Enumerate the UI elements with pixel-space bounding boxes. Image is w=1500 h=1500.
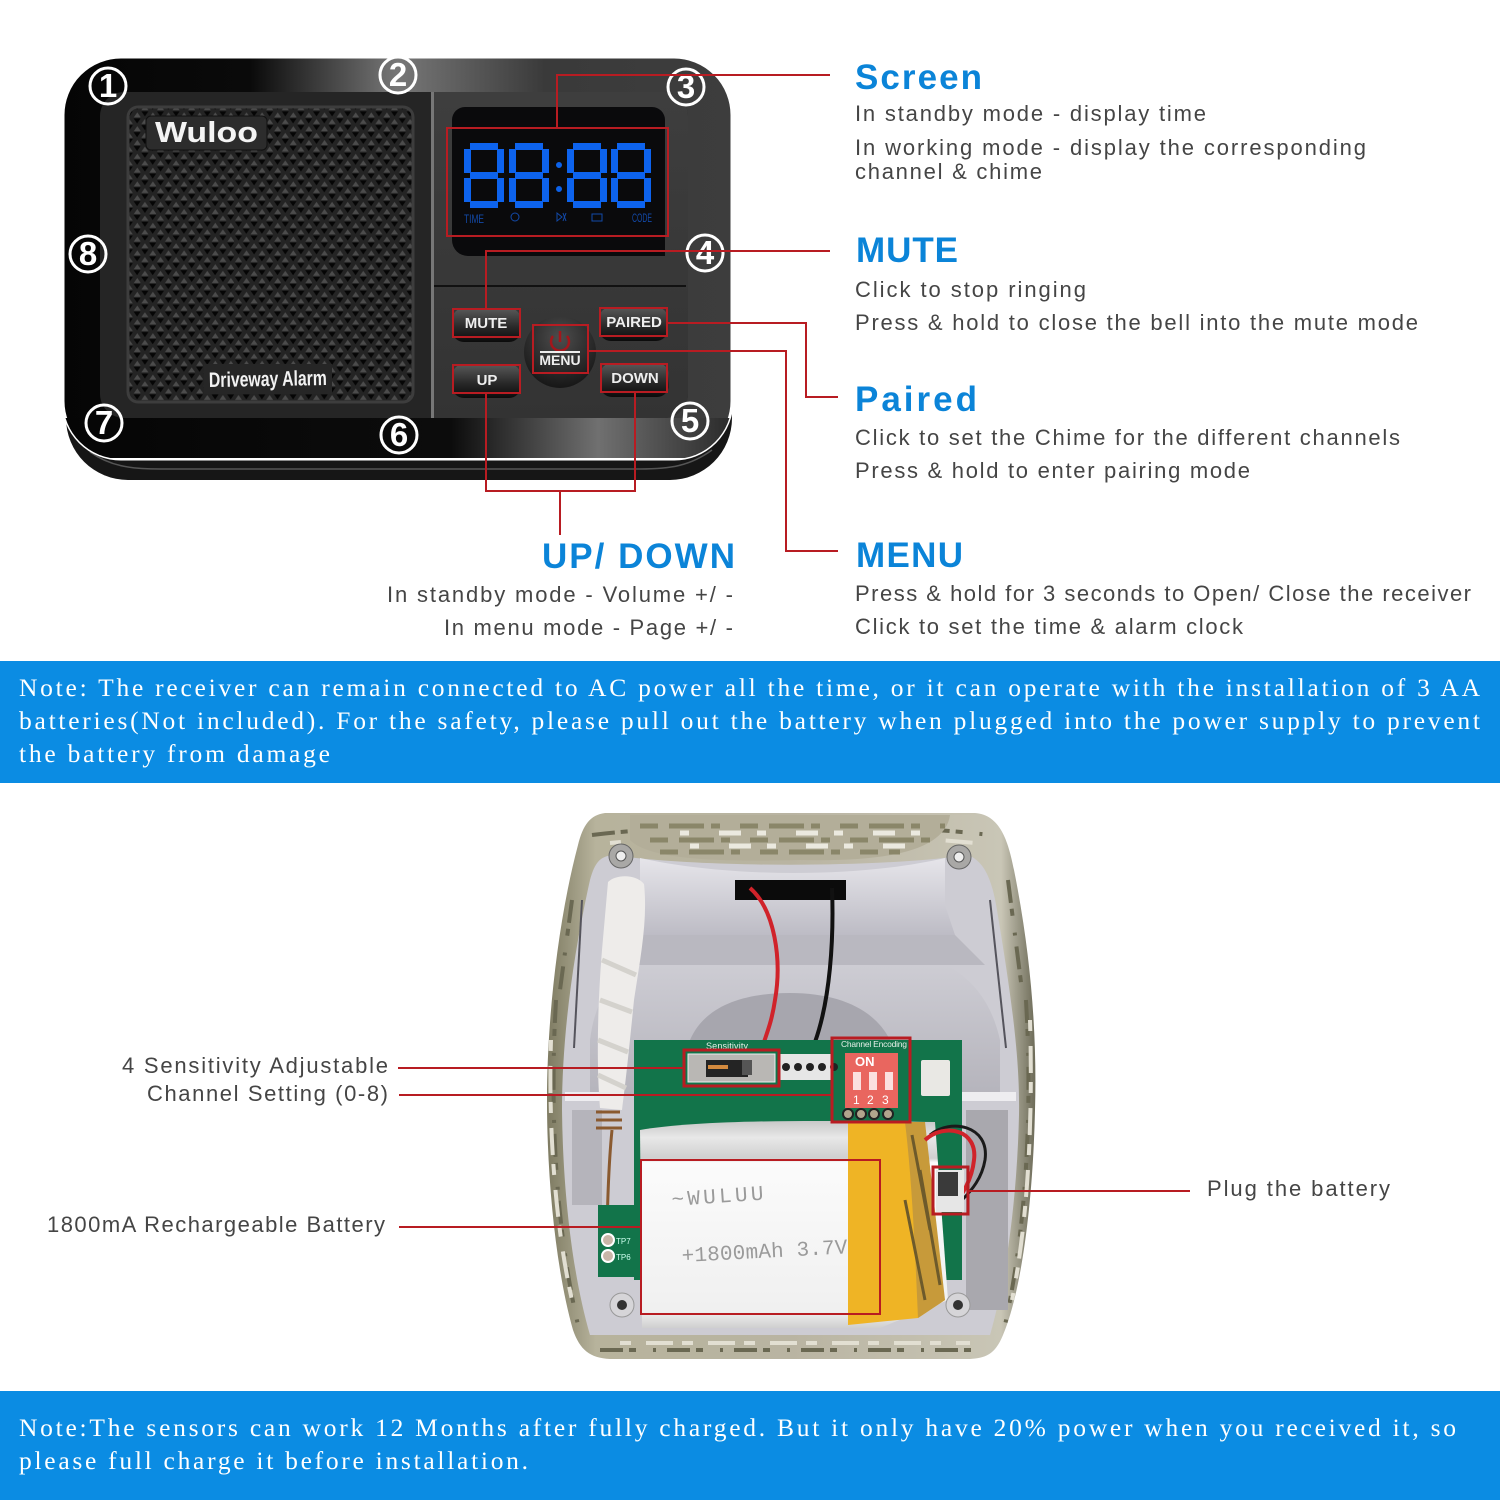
- digit 4: [614, 146, 648, 204]
- screw number 8: [70, 235, 106, 272]
- DIP switch: 1: [853, 1093, 860, 1107]
- speaker mesh: [128, 107, 413, 402]
- label: sensitivity and channel: [122, 1053, 388, 1106]
- screw number 1: [90, 67, 126, 104]
- callout: UP/ DOWN: [387, 537, 735, 640]
- screw number 4: [687, 234, 723, 271]
- screw number 3: 3: [677, 68, 695, 105]
- screw number 1: 1: [99, 67, 117, 104]
- screw number 5: [672, 402, 708, 439]
- battery black lead wire: [930, 1126, 985, 1200]
- board test points: TP6: [616, 1253, 631, 1262]
- callout: Screen: In working mode - display the corresponding: [855, 135, 1366, 160]
- screw number 6: [381, 416, 417, 453]
- screw number 2: 2: [389, 56, 407, 93]
- button MENU: MENU: [539, 352, 581, 368]
- display screen: [452, 107, 665, 256]
- callout: Paired: Click to set the Chime for the different channels: [855, 425, 1400, 450]
- digit 1: [468, 146, 500, 204]
- lower side recess right: [966, 1110, 1008, 1310]
- button MUTE: [452, 308, 521, 342]
- callout: Screen: channel & chime: [855, 159, 1042, 184]
- inner faceplate: [100, 92, 688, 418]
- callout: Screen: [855, 58, 1366, 184]
- label: sensitivity and channel: 4 Sensitivity Adjustable: [122, 1053, 388, 1078]
- pin header: [780, 1054, 838, 1080]
- foil body: [640, 1121, 948, 1328]
- product badge: [204, 364, 332, 394]
- screw number 7: [86, 404, 122, 441]
- left board tab: [598, 1205, 648, 1277]
- DIP switch: [845, 1053, 898, 1108]
- note band: AC power: batteries(Not included). For the safety, please pull out the battery when plugged into the power supply to prevent: [19, 706, 1480, 735]
- circuit board: [634, 1040, 962, 1280]
- shell interior: [562, 855, 1019, 1335]
- right screw: [947, 845, 971, 869]
- gold film streaks: [905, 1135, 940, 1300]
- note band: AC power: Note: The receiver can remain connected to AC power all the time, or it can operate with the installation of 3 AA: [19, 673, 1481, 702]
- solder pads: [843, 1109, 893, 1119]
- top shell band: [630, 815, 950, 861]
- red highlight boxes and leader lines on sensor: [398, 1038, 1190, 1314]
- board test points: TP7: [616, 1237, 631, 1246]
- DIP switch: 2: [867, 1093, 874, 1107]
- label: battery: 1800mA Rechargeable Battery: [47, 1212, 385, 1237]
- screw number 5: 5: [681, 402, 699, 439]
- callout: MUTE: Click to stop ringing: [855, 277, 1086, 302]
- callout: Paired: Paired: [855, 380, 977, 419]
- button MUTE: MUTE: [465, 315, 507, 332]
- speaker dome: [690, 993, 890, 1040]
- battery plug: [936, 1170, 964, 1212]
- board test points: [602, 1234, 631, 1262]
- frame bottom highlight: [63, 418, 732, 458]
- side shelf right: [962, 1092, 1016, 1101]
- screw number 7: 7: [95, 404, 113, 441]
- callout: UP/ DOWN: In standby mode - Volume +/ -: [387, 582, 733, 607]
- drum housing: [590, 955, 1000, 1095]
- lower side recess left: [572, 1110, 602, 1205]
- brand badge: [146, 116, 267, 150]
- screw number 2: [380, 56, 416, 93]
- receiver device illustration: [63, 56, 732, 480]
- digit 2: [512, 146, 546, 204]
- callout: Screen: In standby mode - display time: [855, 101, 1206, 126]
- sensitivity label: Sensitivity: [706, 1041, 748, 1051]
- battery red lead wire: [925, 1130, 974, 1208]
- note band: charging: Note:The sensors can work 12 Months after fully charged. But it only have 20% power when you received it, so: [19, 1413, 1456, 1442]
- device base lower edge: [90, 450, 712, 469]
- note band: AC power: the battery from damage: [19, 739, 330, 768]
- lower wall shading: [608, 935, 985, 965]
- product badge: Driveway Alarm: [209, 367, 327, 392]
- button DOWN: DOWN: [611, 370, 659, 387]
- callout: UP/ DOWN: In menu mode - Page +/ -: [444, 615, 733, 640]
- panel divider vertical: [431, 92, 434, 418]
- red highlight boxes and leader lines on device: [447, 75, 838, 551]
- yellow tape: [848, 1122, 945, 1325]
- callout: Screen: Screen: [855, 58, 982, 97]
- note band: charging: [0, 1391, 1500, 1500]
- top band highlights: [680, 833, 920, 846]
- sensor interior photo illustration: [547, 813, 1035, 1359]
- label: sensitivity and channel: Channel Setting (0-8): [147, 1081, 388, 1106]
- callout: UP/ DOWN: UP/ DOWN: [542, 537, 735, 576]
- callout: MENU: Click to set the time & alarm clock: [855, 614, 1244, 639]
- sensor camouflage shell: [547, 813, 1035, 1359]
- callout: MENU: [855, 536, 1471, 639]
- callout: MUTE: Press & hold to close the bell into the mute mode: [855, 310, 1418, 335]
- button PAIRED: PAIRED: [606, 314, 662, 331]
- note band: charging: please full charge it before installation.: [19, 1446, 528, 1475]
- white card behind wires: [640, 858, 955, 935]
- lower left boss: [610, 1293, 634, 1317]
- foam wrapped antenna: [598, 876, 645, 1110]
- callout: MUTE: MUTE: [856, 231, 958, 270]
- battery plug socket: [938, 1172, 958, 1196]
- screen legend: TIME: [464, 212, 484, 226]
- device base shadow: [66, 85, 732, 480]
- side groove left: [574, 900, 582, 1048]
- button UP: UP: [477, 372, 497, 389]
- speaker grille panel: [128, 107, 413, 402]
- black wire: [815, 888, 832, 1042]
- crumpled gold film: [905, 1122, 945, 1318]
- white connector: [921, 1060, 950, 1096]
- device front frame: [63, 57, 732, 459]
- right control panel: [434, 92, 688, 418]
- sensitivity slide switch: [688, 1054, 775, 1082]
- callout: MUTE: [855, 231, 1418, 335]
- foam shading: [598, 960, 636, 1088]
- top band texture: [640, 826, 945, 852]
- screen legend: [464, 211, 652, 226]
- callout: MENU: MENU: [856, 536, 963, 575]
- note band: AC power: [0, 661, 1500, 783]
- lower right boss: [946, 1293, 970, 1317]
- callout: MENU: Press & hold for 3 seconds to Open/ Close the receiver: [855, 581, 1471, 606]
- screen bezel: [452, 107, 665, 256]
- DIP switch: 3: [882, 1093, 889, 1107]
- callout: Paired: [855, 380, 1400, 483]
- shell mottling light: [550, 835, 1031, 1343]
- antenna coil: [596, 1112, 622, 1225]
- battery text line 1: ~WULUU: [671, 1184, 764, 1213]
- label: plug: Plug the battery: [1207, 1176, 1390, 1201]
- shell mottling dark: [554, 825, 1028, 1350]
- button UP: [452, 364, 521, 398]
- battery text line 2: +1800mAh 3.7V: [681, 1237, 849, 1269]
- side groove right: [990, 900, 1006, 1048]
- speaker terminal strip: [735, 880, 846, 900]
- button MENU: [524, 316, 596, 388]
- screen legend: CODE: [632, 211, 652, 225]
- button DOWN: [600, 363, 669, 397]
- channel encoding label: Channel Encoding: [841, 1039, 907, 1049]
- screw number 8: 8: [79, 235, 97, 272]
- digit 3: [570, 146, 604, 204]
- panel divider horizontal: [434, 285, 686, 287]
- screw number 4: 4: [696, 234, 715, 271]
- screw number 3: [668, 68, 704, 105]
- left screw: [609, 844, 633, 868]
- battery pack: [640, 1121, 948, 1328]
- button PAIRED: [599, 307, 668, 341]
- colon: [556, 162, 562, 192]
- side shelf left: [565, 1092, 605, 1101]
- red wire: [750, 888, 778, 1042]
- DIP switch: ON: [855, 1054, 874, 1069]
- callout: Paired: Press & hold to enter pairing mode: [855, 458, 1250, 483]
- brand badge: Wuloo: [155, 117, 258, 149]
- screw number 6: 6: [390, 416, 408, 453]
